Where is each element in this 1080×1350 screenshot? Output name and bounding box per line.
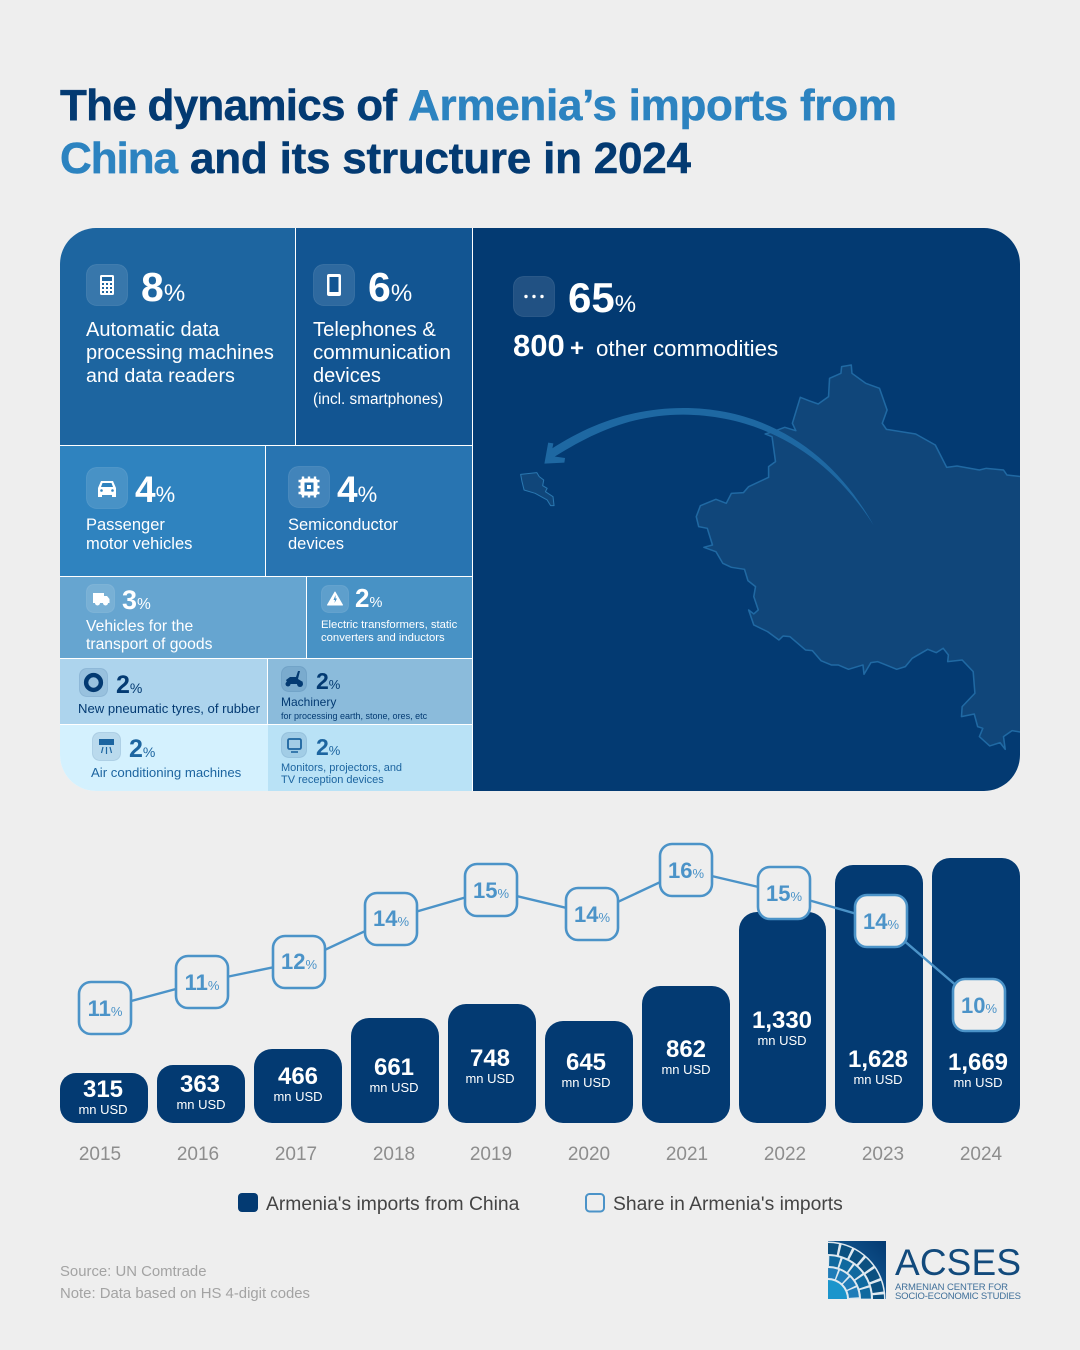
tile: vehicles for the transport of goods 3% bbox=[60, 577, 306, 658]
bar: 2016 bbox=[157, 1065, 245, 1123]
bar: 2020: mn USD bbox=[561, 1075, 611, 1090]
tile: passenger motor vehicles 4%: Passenger bbox=[86, 516, 165, 534]
text: 800+ other commodities: 800 bbox=[513, 328, 565, 363]
tile: automatic data processing machines 8% bbox=[60, 228, 295, 445]
panel: other commodities 65% with map bbox=[473, 228, 1028, 791]
label: 2021 share: 16% bbox=[668, 858, 704, 883]
tile: vehicles for the transport of goods 3%: transport of goods bbox=[86, 636, 213, 653]
bar: 2019 bbox=[448, 1004, 536, 1123]
tile: passenger motor vehicles 4% bbox=[60, 446, 265, 576]
label: 2021 share bbox=[660, 844, 712, 896]
tile: machinery 2%: Machinery bbox=[281, 695, 336, 709]
bar: 2017 bbox=[254, 1049, 342, 1123]
source note bbox=[60, 1264, 310, 1302]
tile: semiconductor devices 4%: Semiconductor bbox=[288, 516, 399, 534]
year axis labels: 2015 bbox=[79, 1144, 121, 1165]
bar: 2020 bbox=[545, 1021, 633, 1123]
label: 2020 share: 14% bbox=[574, 902, 610, 927]
year axis labels bbox=[79, 1144, 1003, 1165]
logo: ACSES: SOCIO-ECONOMIC STUDIES bbox=[895, 1291, 1021, 1302]
tile: air conditioning machines 2% bbox=[60, 725, 268, 791]
tile: machinery 2%: for processing earth, stone, ores, etc bbox=[281, 711, 428, 721]
bar: 2023 bbox=[835, 865, 923, 1123]
label: 2016 share: 11% bbox=[185, 970, 220, 995]
tile: monitors, projectors and TV 2%: 2% bbox=[316, 734, 341, 760]
label: 2023 share bbox=[855, 895, 907, 947]
map: Armenia outline bbox=[521, 473, 554, 506]
bar: 2021: 862 bbox=[666, 1036, 706, 1063]
tile: semiconductor devices 4% bbox=[266, 446, 472, 576]
bar: 2018 bbox=[351, 1018, 439, 1123]
tile: automatic data processing machines 8%: processing machines bbox=[86, 342, 274, 364]
legend: Armenia's imports from China bbox=[266, 1194, 520, 1215]
tile: telephones and communication devices 6%: devices bbox=[313, 365, 381, 387]
bar: 2015: mn USD bbox=[78, 1102, 128, 1117]
bar: 2022: 1,330 bbox=[752, 1007, 812, 1034]
title: and its structure in 2024 bbox=[190, 134, 692, 183]
chart: imports bars bbox=[60, 858, 1020, 1123]
label: 2016 share bbox=[176, 956, 228, 1008]
label: 2022 share: 15% bbox=[766, 881, 802, 906]
year axis labels: 2022 bbox=[764, 1144, 806, 1165]
tile: machinery 2%: 2% bbox=[316, 668, 341, 694]
bar: 2022 bbox=[739, 912, 826, 1123]
title bbox=[60, 81, 897, 183]
tile: electric transformers 2% bbox=[307, 577, 472, 658]
title: The dynamics of bbox=[60, 81, 397, 130]
legend: Share in Armenia's imports bbox=[613, 1194, 843, 1215]
bar: 2021: mn USD bbox=[661, 1062, 711, 1077]
bar: 2024: 1,669 bbox=[948, 1049, 1008, 1076]
bar: 2015 bbox=[60, 1073, 148, 1123]
tile: semiconductor devices 4%: 4% bbox=[337, 469, 377, 510]
text: 800+ other commodities: + bbox=[570, 335, 584, 362]
icon: more dots bbox=[514, 276, 554, 316]
tile: telephones and communication devices 6%: communication bbox=[313, 341, 451, 364]
tile: monitors, projectors and TV 2%: Monitors, projectors, and bbox=[281, 762, 402, 774]
tile: monitors, projectors and TV 2%: TV reception devices bbox=[281, 774, 384, 786]
bar: 2017: 466 bbox=[278, 1063, 318, 1090]
panel: import structure treemap bbox=[60, 228, 1028, 791]
tile: semiconductor devices 4%: devices bbox=[288, 535, 344, 553]
label: 2017 share bbox=[273, 936, 325, 988]
tile: vehicles for the transport of goods 3%: Vehicles for the bbox=[86, 618, 194, 635]
bar: 2023: 1,628 bbox=[848, 1046, 908, 1073]
tile: air conditioning machines 2%: 2% bbox=[129, 735, 155, 763]
title: China bbox=[60, 134, 179, 183]
label: 2022 share bbox=[758, 867, 810, 919]
label: 2019 share bbox=[465, 864, 517, 916]
legend bbox=[238, 1193, 843, 1215]
bar: 2016: mn USD bbox=[176, 1097, 226, 1112]
tile: automatic data processing machines 8%: 8% bbox=[141, 264, 185, 310]
logo: ACSES: ACSES bbox=[895, 1242, 1021, 1283]
bar: 2019: 748 bbox=[470, 1045, 510, 1072]
tile: machinery 2% bbox=[268, 659, 472, 724]
year axis labels: 2016 bbox=[177, 1144, 219, 1165]
label: 2017 share: 12% bbox=[281, 949, 317, 974]
bar: 2019: mn USD bbox=[465, 1071, 515, 1086]
chart: share line with percentage labels bbox=[79, 844, 1005, 1034]
tile: automatic data processing machines 8%: Automatic data bbox=[86, 319, 220, 341]
year axis labels: 2018 bbox=[373, 1144, 415, 1165]
label: 2019 share: 15% bbox=[473, 878, 509, 903]
bar: 2018: 661 bbox=[374, 1054, 414, 1081]
tile: air conditioning machines 2%: Air conditioning machines bbox=[91, 765, 242, 780]
year axis labels: 2017 bbox=[275, 1144, 317, 1165]
tile: electric transformers 2%: converters and inductors bbox=[321, 632, 445, 644]
tile: telephones and communication devices 6%: Telephones & bbox=[313, 319, 436, 341]
logo: ACSES bbox=[828, 1241, 1020, 1299]
tile: electric transformers 2%: 2% bbox=[355, 583, 382, 613]
map: China outline bbox=[696, 365, 1028, 749]
source note: Source: UN Comtrade bbox=[60, 1264, 206, 1280]
text: 800+ other commodities: other commodities bbox=[596, 336, 778, 361]
label: 2024 share: 10% bbox=[961, 993, 997, 1018]
bar: 2020: 645 bbox=[566, 1049, 606, 1076]
label: 2023 share: 14% bbox=[863, 909, 899, 934]
bar: 2024 bbox=[932, 858, 1020, 1123]
bar: 2015: 315 bbox=[83, 1076, 123, 1103]
label: 2024 share bbox=[953, 979, 1005, 1031]
logo: ACSES: ARMENIAN CENTER FOR bbox=[895, 1282, 1008, 1293]
year axis labels: 2020 bbox=[568, 1144, 610, 1165]
bar: 2024: mn USD bbox=[953, 1075, 1003, 1090]
tile: telephones and communication devices 6%: 6% bbox=[368, 264, 412, 310]
text: 65%: 65% bbox=[568, 274, 636, 321]
source note: Note: Data based on HS 4-digit codes bbox=[60, 1286, 310, 1302]
bar: 2022: mn USD bbox=[757, 1033, 807, 1048]
tile: automatic data processing machines 8%: and data readers bbox=[86, 365, 235, 387]
tile: monitors, projectors and TV 2% bbox=[268, 725, 472, 791]
label: 2015 share: 11% bbox=[88, 996, 123, 1021]
bar: 2021 bbox=[642, 986, 730, 1123]
label: 2015 share bbox=[79, 982, 131, 1034]
tile: passenger motor vehicles 4%: motor vehicles bbox=[86, 535, 192, 553]
tile: new pneumatic tyres 2%: New pneumatic tyres, of rubber bbox=[78, 701, 261, 716]
tile: electric transformers 2%: Electric transformers, static bbox=[321, 619, 458, 631]
tile: telephones and communication devices 6%: (incl. smartphones) bbox=[313, 391, 443, 408]
bar: 2018: mn USD bbox=[369, 1080, 419, 1095]
year axis labels: 2019 bbox=[470, 1144, 512, 1165]
tile: new pneumatic tyres 2%: 2% bbox=[116, 671, 142, 699]
text: 800+ other commodities bbox=[514, 334, 778, 356]
tile: new pneumatic tyres 2% bbox=[60, 659, 267, 724]
year axis labels: 2021 bbox=[666, 1144, 708, 1165]
bar: 2023: mn USD bbox=[853, 1072, 903, 1087]
year axis labels: 2023 bbox=[862, 1144, 904, 1165]
arrow: China to Armenia bbox=[544, 408, 874, 525]
title: Armenia’s imports from bbox=[408, 81, 897, 130]
label: 2018 share: 14% bbox=[373, 906, 409, 931]
tile: vehicles for the transport of goods 3%: 3% bbox=[122, 585, 151, 615]
bar: 2017: mn USD bbox=[273, 1089, 323, 1104]
year axis labels: 2024 bbox=[960, 1144, 1003, 1165]
label: 2020 share bbox=[566, 888, 618, 940]
tile: passenger motor vehicles 4%: 4% bbox=[135, 469, 175, 510]
tile: telephones and communication devices 6% bbox=[296, 228, 472, 445]
bar: 2016: 363 bbox=[180, 1071, 220, 1098]
label: 2018 share bbox=[365, 893, 417, 945]
